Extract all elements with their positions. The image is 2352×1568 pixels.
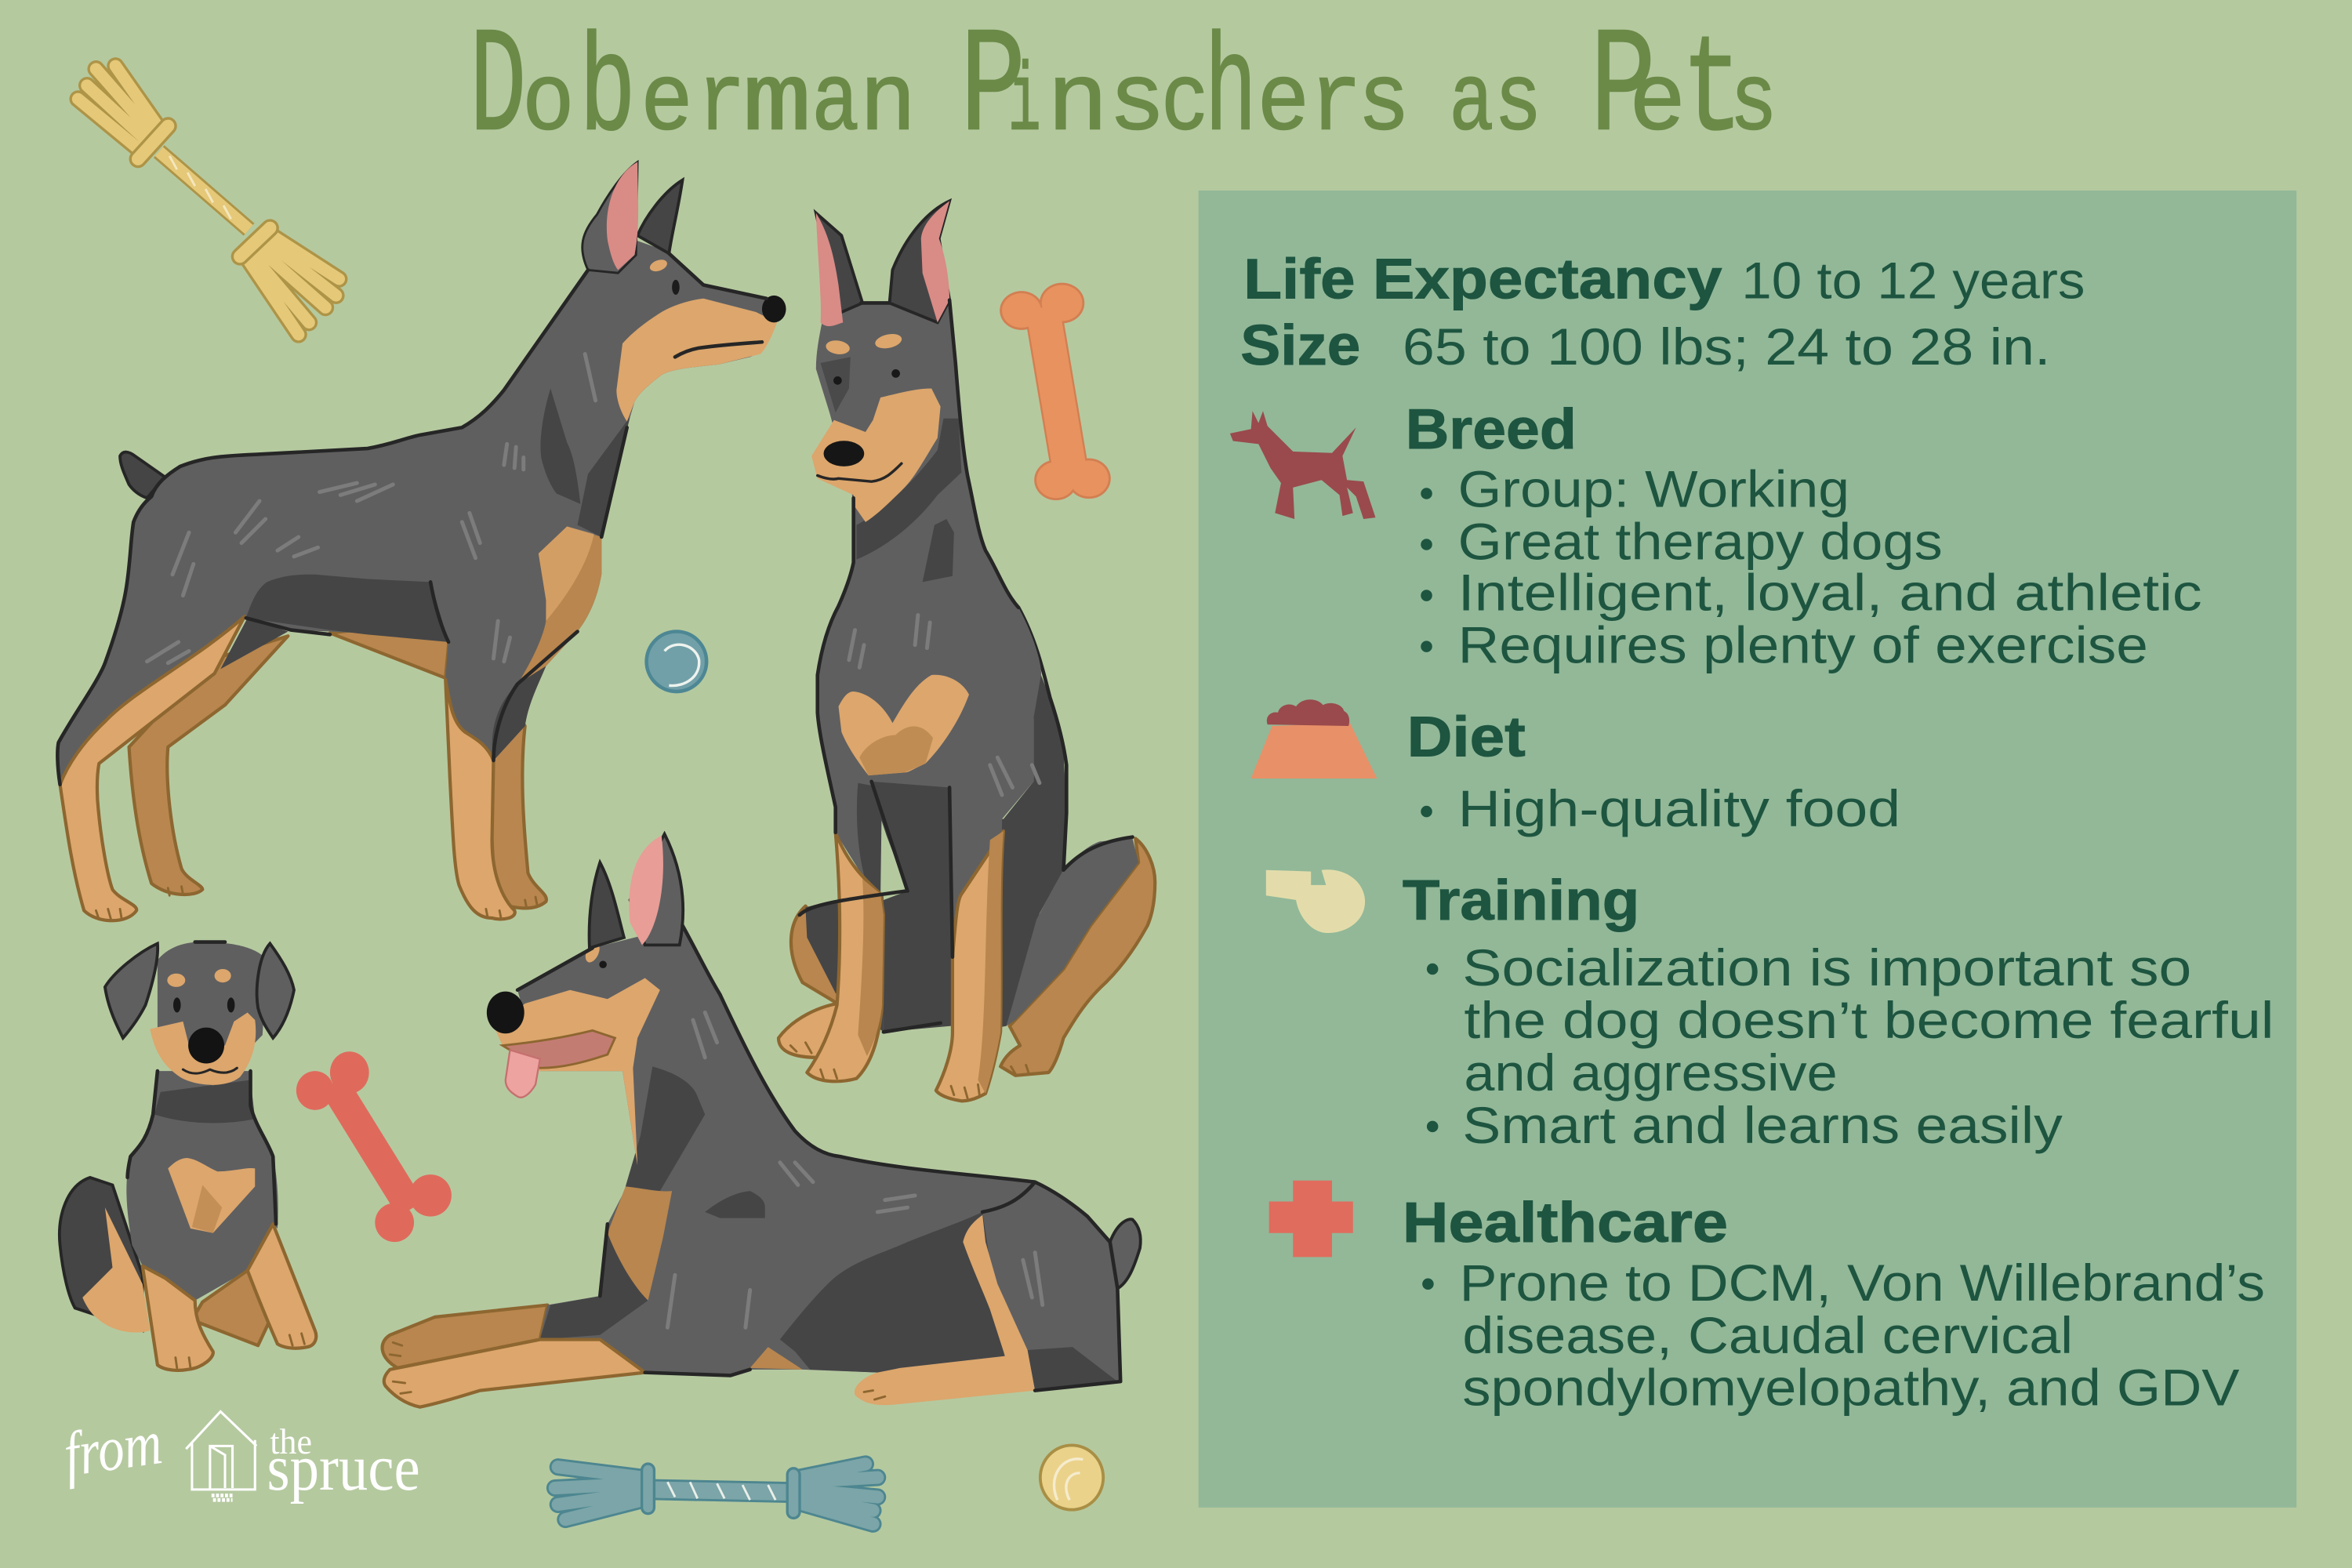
healthcare list [1422,1254,2265,1417]
left front leg [807,833,884,1081]
heading: healthcare: Healthcare [1403,1191,1728,1254]
ear pink [607,162,638,270]
belly tan [750,1347,803,1370]
muzzle [616,299,777,422]
far front leg [488,705,546,908]
head [158,942,267,1086]
healthcare list: Prone to DCM, Von Willebrand’s [1460,1254,2265,1312]
shoulder shade [540,389,580,504]
breed list [1421,460,2202,674]
left ear [816,213,862,314]
nose [188,1028,224,1064]
dog: puppy [60,942,316,1370]
size: 65 to 100 lbs; 24 to 28 in. [1403,318,2050,376]
side patch [705,1191,765,1218]
icon: whistle [1266,869,1365,933]
dog: standing adult [57,162,786,920]
outline [800,300,1018,1032]
paw toes [176,1334,304,1368]
right ear [890,201,949,322]
training list [1427,938,2274,1154]
near arm [384,1340,645,1407]
neck dark [578,417,630,537]
title: s [1494,49,1542,158]
muzzle [150,1012,256,1085]
training list: and aggressive [1464,1044,1838,1102]
left thigh [60,1178,143,1330]
heading: training: Training [1403,869,1639,932]
paw toes [790,1043,1029,1098]
title: P [1590,5,1656,175]
title: m [742,49,811,158]
title: r [1309,49,1362,158]
tail [1110,1219,1141,1288]
left front leg [143,1266,213,1370]
title: h [1204,14,1257,171]
icon: blue ball [647,631,706,691]
mouth [503,1030,615,1068]
muzzle [811,389,941,522]
from: from [60,1407,166,1490]
icon: blue rope toy [555,1464,877,1524]
title: n [859,49,916,158]
title: e [1257,49,1309,158]
the: the [270,1421,312,1461]
chest tan [608,1186,672,1301]
title: s [1730,49,1777,158]
tongue [506,1050,540,1098]
dark center [869,782,953,1032]
dark left ear [590,862,624,948]
body [126,1071,278,1305]
icon: red bone [296,1051,452,1242]
mouth [183,1068,237,1073]
far arm [383,1305,547,1368]
outline [128,942,276,1224]
size [1240,314,2050,377]
title: n [1047,49,1109,158]
title: e [641,49,693,158]
life expectancy: 10 to 12 years [1741,252,2085,310]
spruce: spruce [267,1432,420,1504]
collar [856,419,961,560]
breed list: Great therapy dogs [1458,513,1943,571]
rear dark [1028,1347,1117,1391]
dog: sitting adult [779,201,1155,1101]
paw toes [96,887,537,920]
breed list: Intelligent, loyal, and athletic [1458,564,2202,622]
dog: lying adult [383,834,1141,1407]
brow left [825,339,851,356]
thigh tan [855,1215,1035,1405]
outline [517,925,1120,1391]
eye [599,960,607,968]
dark belly [246,575,448,642]
fur strokes [849,615,1040,795]
tail [120,452,165,498]
heading: diet: Diet [1407,705,1526,768]
right hind thigh tan [1000,839,1155,1076]
near ear [583,162,637,273]
title: a [811,49,859,158]
house icon [186,1411,256,1500]
brow [648,257,669,274]
right body shadow [960,616,1066,1035]
title: c [1161,49,1209,158]
rear dark underside [220,618,288,669]
fur strokes [667,1012,1043,1327]
shoulder patch [923,519,954,582]
brow [583,941,602,964]
icon: yellow rope toy [78,66,339,335]
right ear [257,943,294,1038]
main body and head [816,240,1041,957]
title: s [1358,49,1410,158]
title: t [1682,14,1743,171]
eye patch [821,357,851,412]
left shoulder dark [540,1233,648,1340]
size: Size [1240,314,1360,377]
left ear [105,943,158,1038]
leg triangle gap [880,833,908,900]
eyes [173,997,234,1012]
paw toes [390,1342,885,1399]
healthcare list: spondylomyelopathy, and GDV [1462,1359,2240,1417]
belly tan [330,622,450,678]
life expectancy: Life Expectancy [1243,248,1722,311]
breed list: Requires plenty of exercise [1458,616,2148,674]
fur strokes [147,354,596,663]
logo: from the spruce [60,1407,420,1504]
title: s [1109,49,1166,158]
right front leg [248,1224,316,1348]
brow right [874,332,903,350]
body [57,225,785,785]
icon: food bowl [1251,699,1377,779]
leg left shade [857,783,882,894]
healthcare list: disease, Caudal cervical [1462,1306,2073,1364]
front leg dark [492,666,546,760]
muzzle [495,978,660,1166]
left hind paw [779,1002,855,1058]
near front leg [445,680,515,919]
mouth [675,342,762,357]
panel: breed facts [1199,191,2296,1508]
icon: yellow ball [1040,1445,1103,1510]
training list: Socialization is important so [1462,938,2191,996]
eye [672,280,680,295]
near hind leg [60,616,245,920]
eyes [833,369,900,385]
chest [168,1158,255,1233]
far hind leg [129,636,288,895]
title: r [698,49,746,158]
left hind thigh [791,906,848,1005]
icon: orange bone [1000,283,1111,500]
heading: breed: Breed [1406,397,1577,461]
icon: medical cross [1269,1181,1353,1257]
mouth [818,463,902,481]
right ear [630,834,683,945]
neck dark [626,1066,705,1191]
chest tan [839,675,969,775]
main body [517,925,1120,1391]
title: i [1008,49,1041,158]
title: b [579,14,636,171]
neck dark [154,1080,255,1123]
right hind leg [192,1271,270,1345]
title: a [1449,49,1494,158]
title: o [522,49,575,158]
training list: the dog doesn’t become fearful [1464,991,2274,1049]
right front leg [936,831,1004,1101]
outline [57,253,767,785]
nose [824,441,864,466]
nose [487,992,524,1033]
chest light [539,527,594,621]
title: P [960,5,1026,175]
life expectancy [1243,248,2085,311]
icon: dog silhouette [1230,411,1375,519]
chest tan [517,527,601,684]
far ear [637,180,683,253]
nose [762,296,786,322]
title: e [1629,49,1686,158]
brows [167,969,231,987]
breed list: Group: Working [1458,460,1849,518]
diet list: High-quality food [1458,779,1900,837]
dark belly [780,1212,1005,1373]
training list: Smart and learns easily [1462,1096,2063,1154]
right thigh gray [1007,839,1138,1026]
title: D [470,5,527,175]
